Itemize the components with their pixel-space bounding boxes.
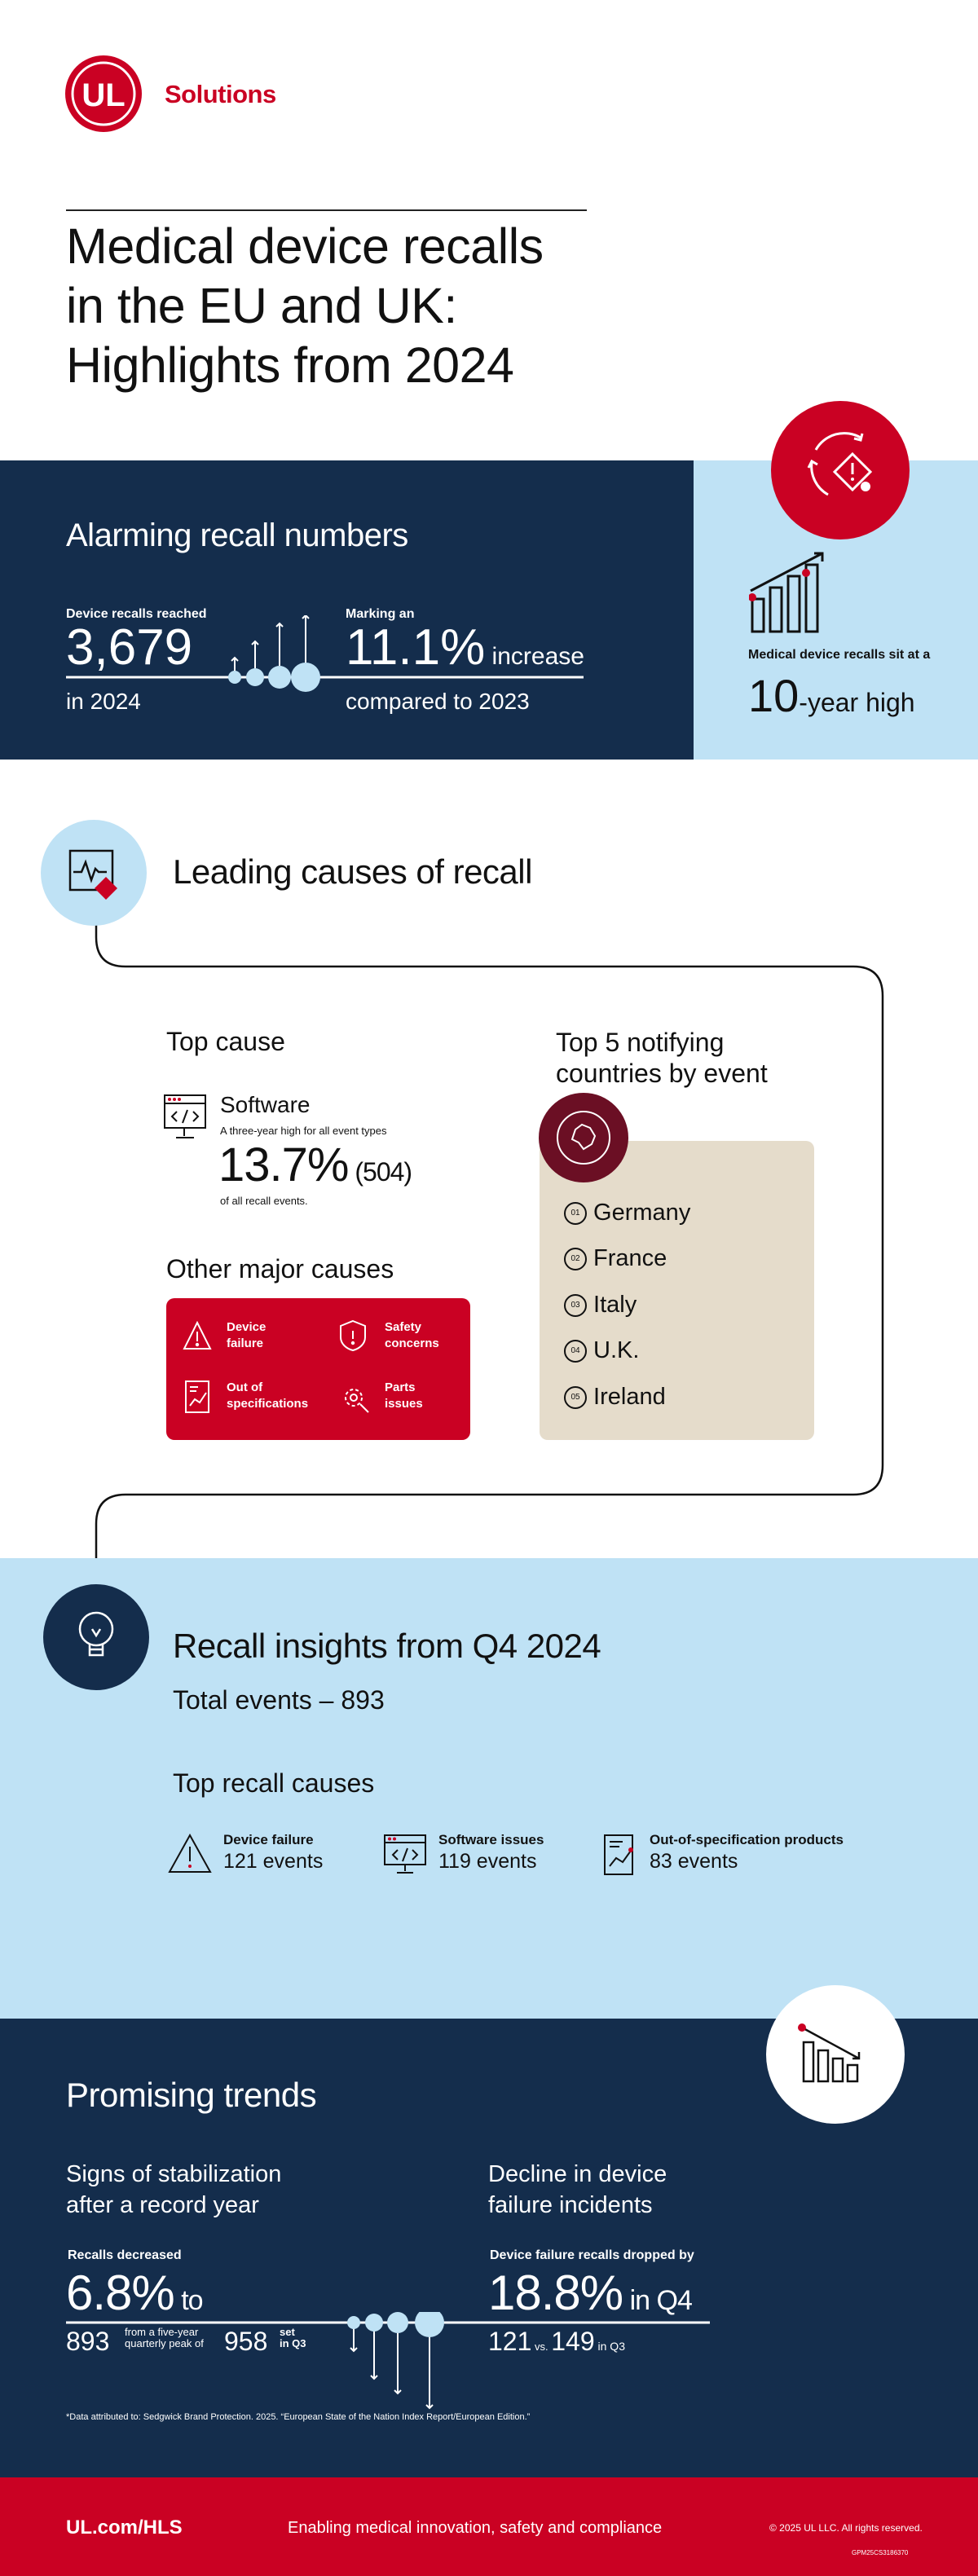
panel: other causes	[166, 1298, 470, 1440]
item: device failure: Device failure	[223, 1832, 314, 1847]
stat: 6.8%: Recalls decreased	[68, 2248, 182, 2262]
item: out-of-spec: Out-of-specification products	[650, 1832, 844, 1847]
stat: 6.8%: in Q3	[280, 2337, 306, 2349]
text: 10-year high: 10-year high	[748, 670, 915, 721]
item: out of specifications: specifications	[227, 1397, 308, 1411]
stat: 18.8%: 121 vs. 149 in Q3	[488, 2327, 625, 2356]
title: Medical device recalls	[66, 218, 544, 274]
subheading: decline: failure incidents	[488, 2192, 652, 2218]
list: countries: France	[593, 1245, 667, 1271]
icon: software	[164, 1094, 206, 1138]
subheading: stabilization	[66, 2161, 281, 2218]
heading: other major causes: Other major causes	[166, 1254, 394, 1284]
panel: Q4 insights	[0, 1558, 978, 2019]
stat: 6.8%	[66, 2248, 306, 2356]
list: countries: 02	[570, 1254, 580, 1263]
list: countries: Germany	[593, 1200, 690, 1226]
stat: 3,679: 3,679	[66, 619, 192, 676]
footer: UL.com/HLS	[66, 2517, 183, 2539]
footer: GPM25CS3186370	[852, 2549, 908, 2556]
item: device failure: Device	[227, 1320, 266, 1334]
item: device failure: 121 events	[223, 1850, 323, 1873]
heading: top 5 countries: countries by event	[556, 1059, 768, 1088]
list: countries: U.K.	[593, 1337, 639, 1363]
title: Highlights from 2024	[66, 337, 513, 393]
icon: europe map	[539, 1093, 628, 1182]
panel: Q4 insights: Total events – 893	[173, 1685, 385, 1715]
item: out of specifications	[185, 1380, 308, 1413]
stat: 6.8%: quarterly peak of	[125, 2337, 204, 2349]
item: parts issues: issues	[385, 1397, 423, 1411]
stat: 3,679: in 2024	[66, 689, 141, 714]
item: device failure	[183, 1320, 266, 1350]
icon: monitor	[41, 820, 147, 926]
panel: countries	[540, 1141, 814, 1440]
list: countries: 04	[570, 1346, 580, 1355]
stat: 18.8%: 18.8% in Q4	[488, 2266, 692, 2320]
icon: recall circle	[771, 401, 910, 539]
stat: 11.1%: compared to 2023	[346, 689, 530, 714]
list: countries: 05	[570, 1393, 580, 1402]
stat: 3,679	[66, 607, 207, 714]
item: parts issues: Parts	[385, 1380, 416, 1394]
item: safety concerns	[340, 1320, 439, 1351]
stat: 3,679: Device recalls reached	[66, 607, 207, 621]
list: countries: 03	[570, 1301, 580, 1310]
heading: promising trends: Promising trends	[66, 2076, 316, 2114]
chart: rising circles	[66, 615, 584, 692]
item: device failure: failure	[227, 1336, 263, 1350]
stat: 11.1%: 11.1% increase	[346, 619, 584, 676]
item: parts issues	[345, 1380, 423, 1413]
item: out-of-spec	[604, 1832, 844, 1875]
stat: 6.8%: set	[280, 2326, 295, 2338]
logo: UL	[82, 77, 126, 113]
footer: Enabling medical innovation, safety and compliance	[288, 2519, 662, 2537]
panel: alarming recall numbers	[0, 460, 694, 760]
top cause: A three-year high for all event types	[220, 1125, 387, 1137]
heading: leading causes: Leading causes of recall	[173, 852, 532, 891]
item: out of specifications: Out of	[227, 1380, 262, 1394]
list: countries: Italy	[593, 1292, 637, 1318]
top cause: of all recall events.	[220, 1195, 308, 1207]
top cause: 13.7% (504)	[218, 1138, 412, 1191]
footer: © 2025 UL LLC. All rights reserved.	[769, 2522, 923, 2534]
top cause: Software	[220, 1092, 310, 1117]
logo	[65, 55, 276, 132]
stat: 11.1%: Marking an	[346, 607, 414, 621]
top cause	[164, 1027, 412, 1207]
text: 10-year high	[748, 648, 931, 721]
list: countries: Ireland	[593, 1384, 666, 1410]
item: device failure	[168, 1832, 323, 1873]
stat: 18.8%: Device failure recalls dropped by	[490, 2248, 694, 2262]
subheading: decline	[488, 2161, 667, 2218]
heading: top 5 countries: Top 5 notifying	[556, 1028, 724, 1057]
heading: Alarming recall numbers	[66, 517, 408, 553]
list: countries	[564, 1200, 691, 1410]
item: safety concerns: Safety	[385, 1320, 421, 1334]
item: out-of-spec: 83 events	[650, 1850, 738, 1873]
chart: declining circles	[66, 2312, 710, 2409]
subheading: stabilization: after a record year	[66, 2192, 259, 2218]
item: safety concerns: concerns	[385, 1336, 439, 1350]
stat: 6.8%: 6.8% to	[66, 2266, 203, 2320]
list: countries: 01	[570, 1209, 580, 1218]
text: 10-year high: Medical device recalls sit at a	[748, 648, 930, 662]
footnote: *Data attributed to: Sedgwick Brand Protection. 2025. “European State of the Nation Index Report/European Edition.”	[66, 2412, 530, 2422]
panel: 10-year high	[694, 460, 978, 760]
footer	[0, 2477, 978, 2576]
heading: top 5 countries	[556, 1028, 768, 1088]
subheading: decline: Decline in device	[488, 2161, 667, 2187]
title	[66, 218, 544, 393]
item: software issues: Software issues	[438, 1832, 544, 1847]
item: software issues: 119 events	[438, 1850, 536, 1873]
stat: 18.8%	[488, 2248, 694, 2356]
stat: 11.1%	[346, 607, 584, 714]
subheading: stabilization: Signs of stabilization	[66, 2161, 281, 2187]
stat: 6.8%: from a five-year	[125, 2326, 198, 2338]
heading: Q4: Recall insights from Q4 2024	[173, 1627, 601, 1665]
panel: Q4 insights: Top recall causes	[173, 1768, 374, 1798]
icon: declining chart	[766, 1985, 905, 2124]
title: in the EU and UK:	[66, 278, 457, 333]
stat: 6.8%: 958	[224, 2327, 267, 2356]
panel: promising trends	[0, 2019, 978, 2477]
stat: 6.8%: 893	[66, 2327, 109, 2356]
icon: lightbulb	[43, 1584, 149, 1690]
item: software issues	[384, 1832, 544, 1874]
logo: Solutions	[165, 80, 276, 108]
top cause: Top cause	[166, 1027, 285, 1056]
icon: bar chart	[749, 553, 823, 632]
